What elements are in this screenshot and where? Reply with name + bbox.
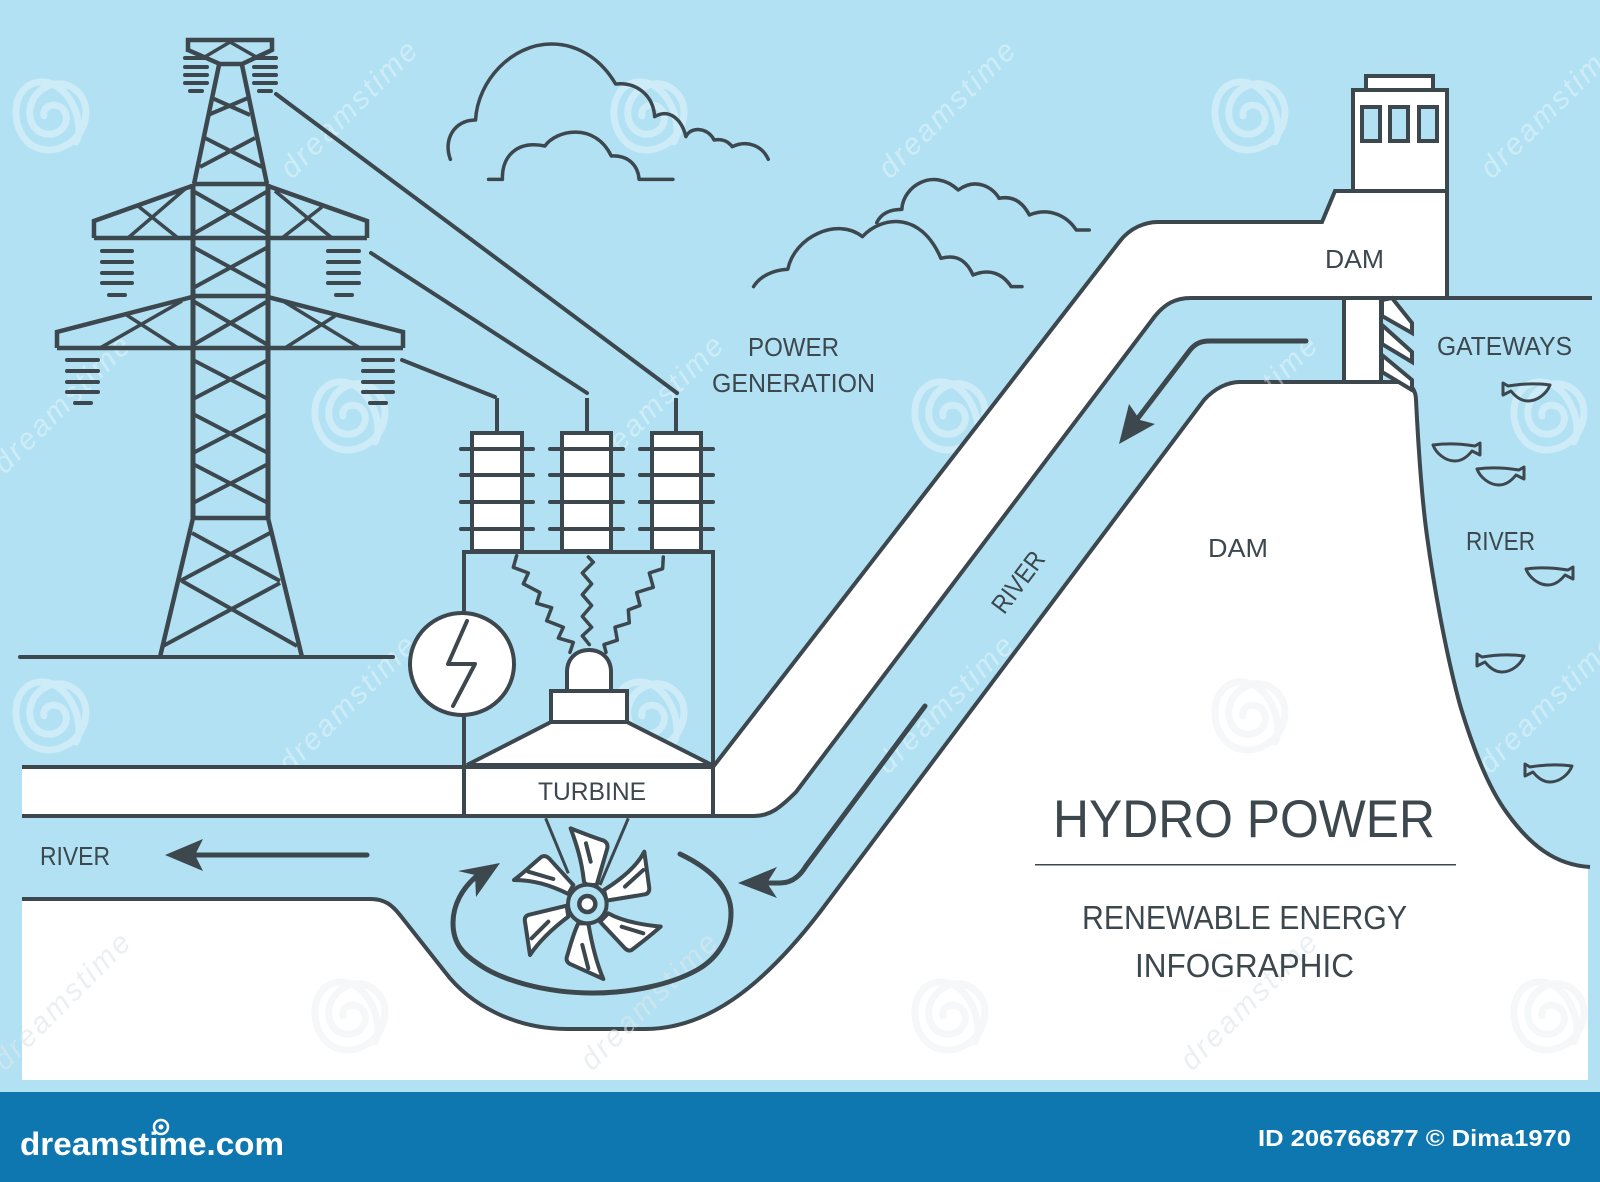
tower windows bbox=[1362, 107, 1437, 141]
tower body bbox=[1353, 90, 1447, 191]
fan shaft bbox=[546, 818, 628, 885]
watermarks: dreamstime bbox=[274, 34, 424, 185]
gateways bbox=[1344, 298, 1412, 390]
clouds bbox=[448, 44, 1089, 287]
generator housing bbox=[464, 552, 713, 766]
footer band bbox=[0, 1092, 1600, 1182]
dam control tower bbox=[1353, 76, 1447, 191]
watermarks: dreamstime bbox=[580, 329, 730, 480]
tower cross bracing bbox=[163, 98, 297, 646]
label: power generation bbox=[712, 332, 875, 398]
generator symbol bbox=[410, 613, 514, 715]
turbine box bbox=[464, 767, 713, 816]
label: reservoir river: RIVER bbox=[1466, 526, 1535, 556]
river flow arrow: upper bbox=[1119, 341, 1306, 444]
river flow arrow: outlet bbox=[165, 839, 367, 871]
land: dam body and river bed bbox=[22, 382, 1590, 1080]
tower frame bbox=[57, 40, 403, 657]
watermarks: dreamstime bbox=[872, 34, 1022, 185]
title: HYDRO POWER bbox=[1053, 790, 1435, 849]
fan hub bbox=[568, 885, 607, 923]
fan blades bbox=[514, 828, 661, 979]
label: dam body: DAM bbox=[1208, 533, 1268, 563]
watermarks: dreamstime bbox=[574, 926, 724, 1077]
label: outlet river: RIVER bbox=[40, 841, 110, 871]
turbine fan bbox=[514, 818, 661, 979]
watermarks: dreamstime bbox=[870, 629, 1020, 780]
ground line bbox=[20, 655, 393, 659]
label: power generation: GENERATION bbox=[712, 368, 875, 398]
label: dam crest: DAM bbox=[1325, 244, 1384, 274]
watermarks: dreamstime bbox=[1174, 329, 1324, 480]
coil wires bbox=[513, 556, 663, 652]
river flow arrow: lower bbox=[738, 706, 925, 898]
label: channel river: RIVER bbox=[985, 545, 1051, 619]
upper arms bbox=[94, 186, 367, 238]
gate flaps bbox=[1382, 298, 1412, 390]
footer logo: dreamstime.com bbox=[20, 1126, 284, 1162]
title block bbox=[1035, 790, 1456, 984]
fish bbox=[1433, 383, 1573, 782]
transformer bushings bbox=[461, 433, 713, 551]
insulators bbox=[67, 58, 393, 403]
penstock and dam crest bbox=[22, 191, 1447, 816]
label: power generation: POWER bbox=[748, 332, 839, 362]
tower roof bbox=[1366, 76, 1433, 90]
reservoir water level line bbox=[1447, 296, 1592, 300]
watermarks: dreamstime bbox=[272, 629, 422, 780]
lower arms bbox=[57, 297, 403, 348]
footer credit: ID 206766877 © Dima1970 bbox=[1258, 1125, 1571, 1151]
subtitle line 1: RENEWABLE ENERGY bbox=[1082, 899, 1407, 936]
label: gateways: GATEWAYS bbox=[1437, 331, 1572, 361]
watermarks: dreamstime bbox=[1174, 926, 1324, 1077]
power lines bbox=[276, 94, 677, 433]
gate column bbox=[1344, 298, 1381, 382]
turbine label: TURBINE bbox=[538, 778, 646, 806]
transmission tower bbox=[57, 40, 403, 657]
title rule bbox=[1035, 864, 1456, 866]
generator dome and casing bbox=[467, 650, 712, 765]
subtitle line 2: INFOGRAPHIC bbox=[1135, 947, 1354, 984]
circular flow arrow bbox=[453, 854, 731, 993]
